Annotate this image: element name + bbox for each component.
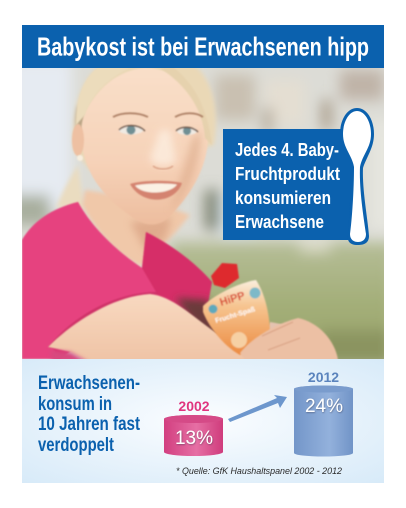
bar: 2002: 2002: [178, 398, 210, 414]
hair front: [76, 104, 85, 124]
arrow: [228, 395, 287, 422]
hand front: [240, 318, 338, 360]
shirt: [22, 202, 212, 359]
pouch: HiPP: [218, 290, 246, 309]
arm: [48, 294, 252, 362]
icon: spoon: [340, 108, 374, 245]
wrist behind: [269, 322, 282, 330]
heading: adult consumption: 10 Jahren fast: [38, 414, 141, 435]
callout text: Erwachsene: [235, 211, 324, 232]
shadow under arm: [174, 293, 216, 333]
pouch: Frucht-Spaß: [215, 306, 257, 325]
bar: 2012: 2012: [308, 369, 339, 385]
bar: 2002: [164, 398, 223, 456]
bottom panel: [22, 359, 384, 483]
callout text: Fruchtprodukt: [235, 163, 340, 184]
face: [72, 66, 212, 224]
nose: [150, 130, 176, 166]
heading: adult consumption: [38, 373, 141, 456]
face shading: [174, 133, 202, 202]
hair back: [56, 62, 216, 208]
heading: adult consumption: verdoppelt: [38, 435, 115, 456]
callout text: konsumieren: [235, 187, 331, 208]
eyes and brows: [113, 113, 203, 135]
mouth: [130, 181, 182, 200]
pouch: [203, 263, 270, 355]
callout text: [235, 139, 340, 232]
source note: * Quelle: GfK Haushaltspanel 2002 - 2012: [176, 466, 343, 477]
bar: 2012: [294, 369, 353, 456]
heading: adult consumption: konsum in: [38, 394, 112, 415]
neck: [82, 190, 190, 266]
blurred background: [22, 68, 384, 359]
callout with spoon: [223, 108, 374, 245]
bar: 2002: 13%: [175, 428, 213, 449]
title bar: [22, 25, 384, 68]
photo: woman holding fruit pouch: [22, 68, 384, 359]
heading: adult consumption: Erwachsenen-: [38, 373, 140, 394]
callout text: Jedes 4. Baby-: [235, 139, 339, 160]
bar: 2012: 24%: [305, 396, 343, 417]
